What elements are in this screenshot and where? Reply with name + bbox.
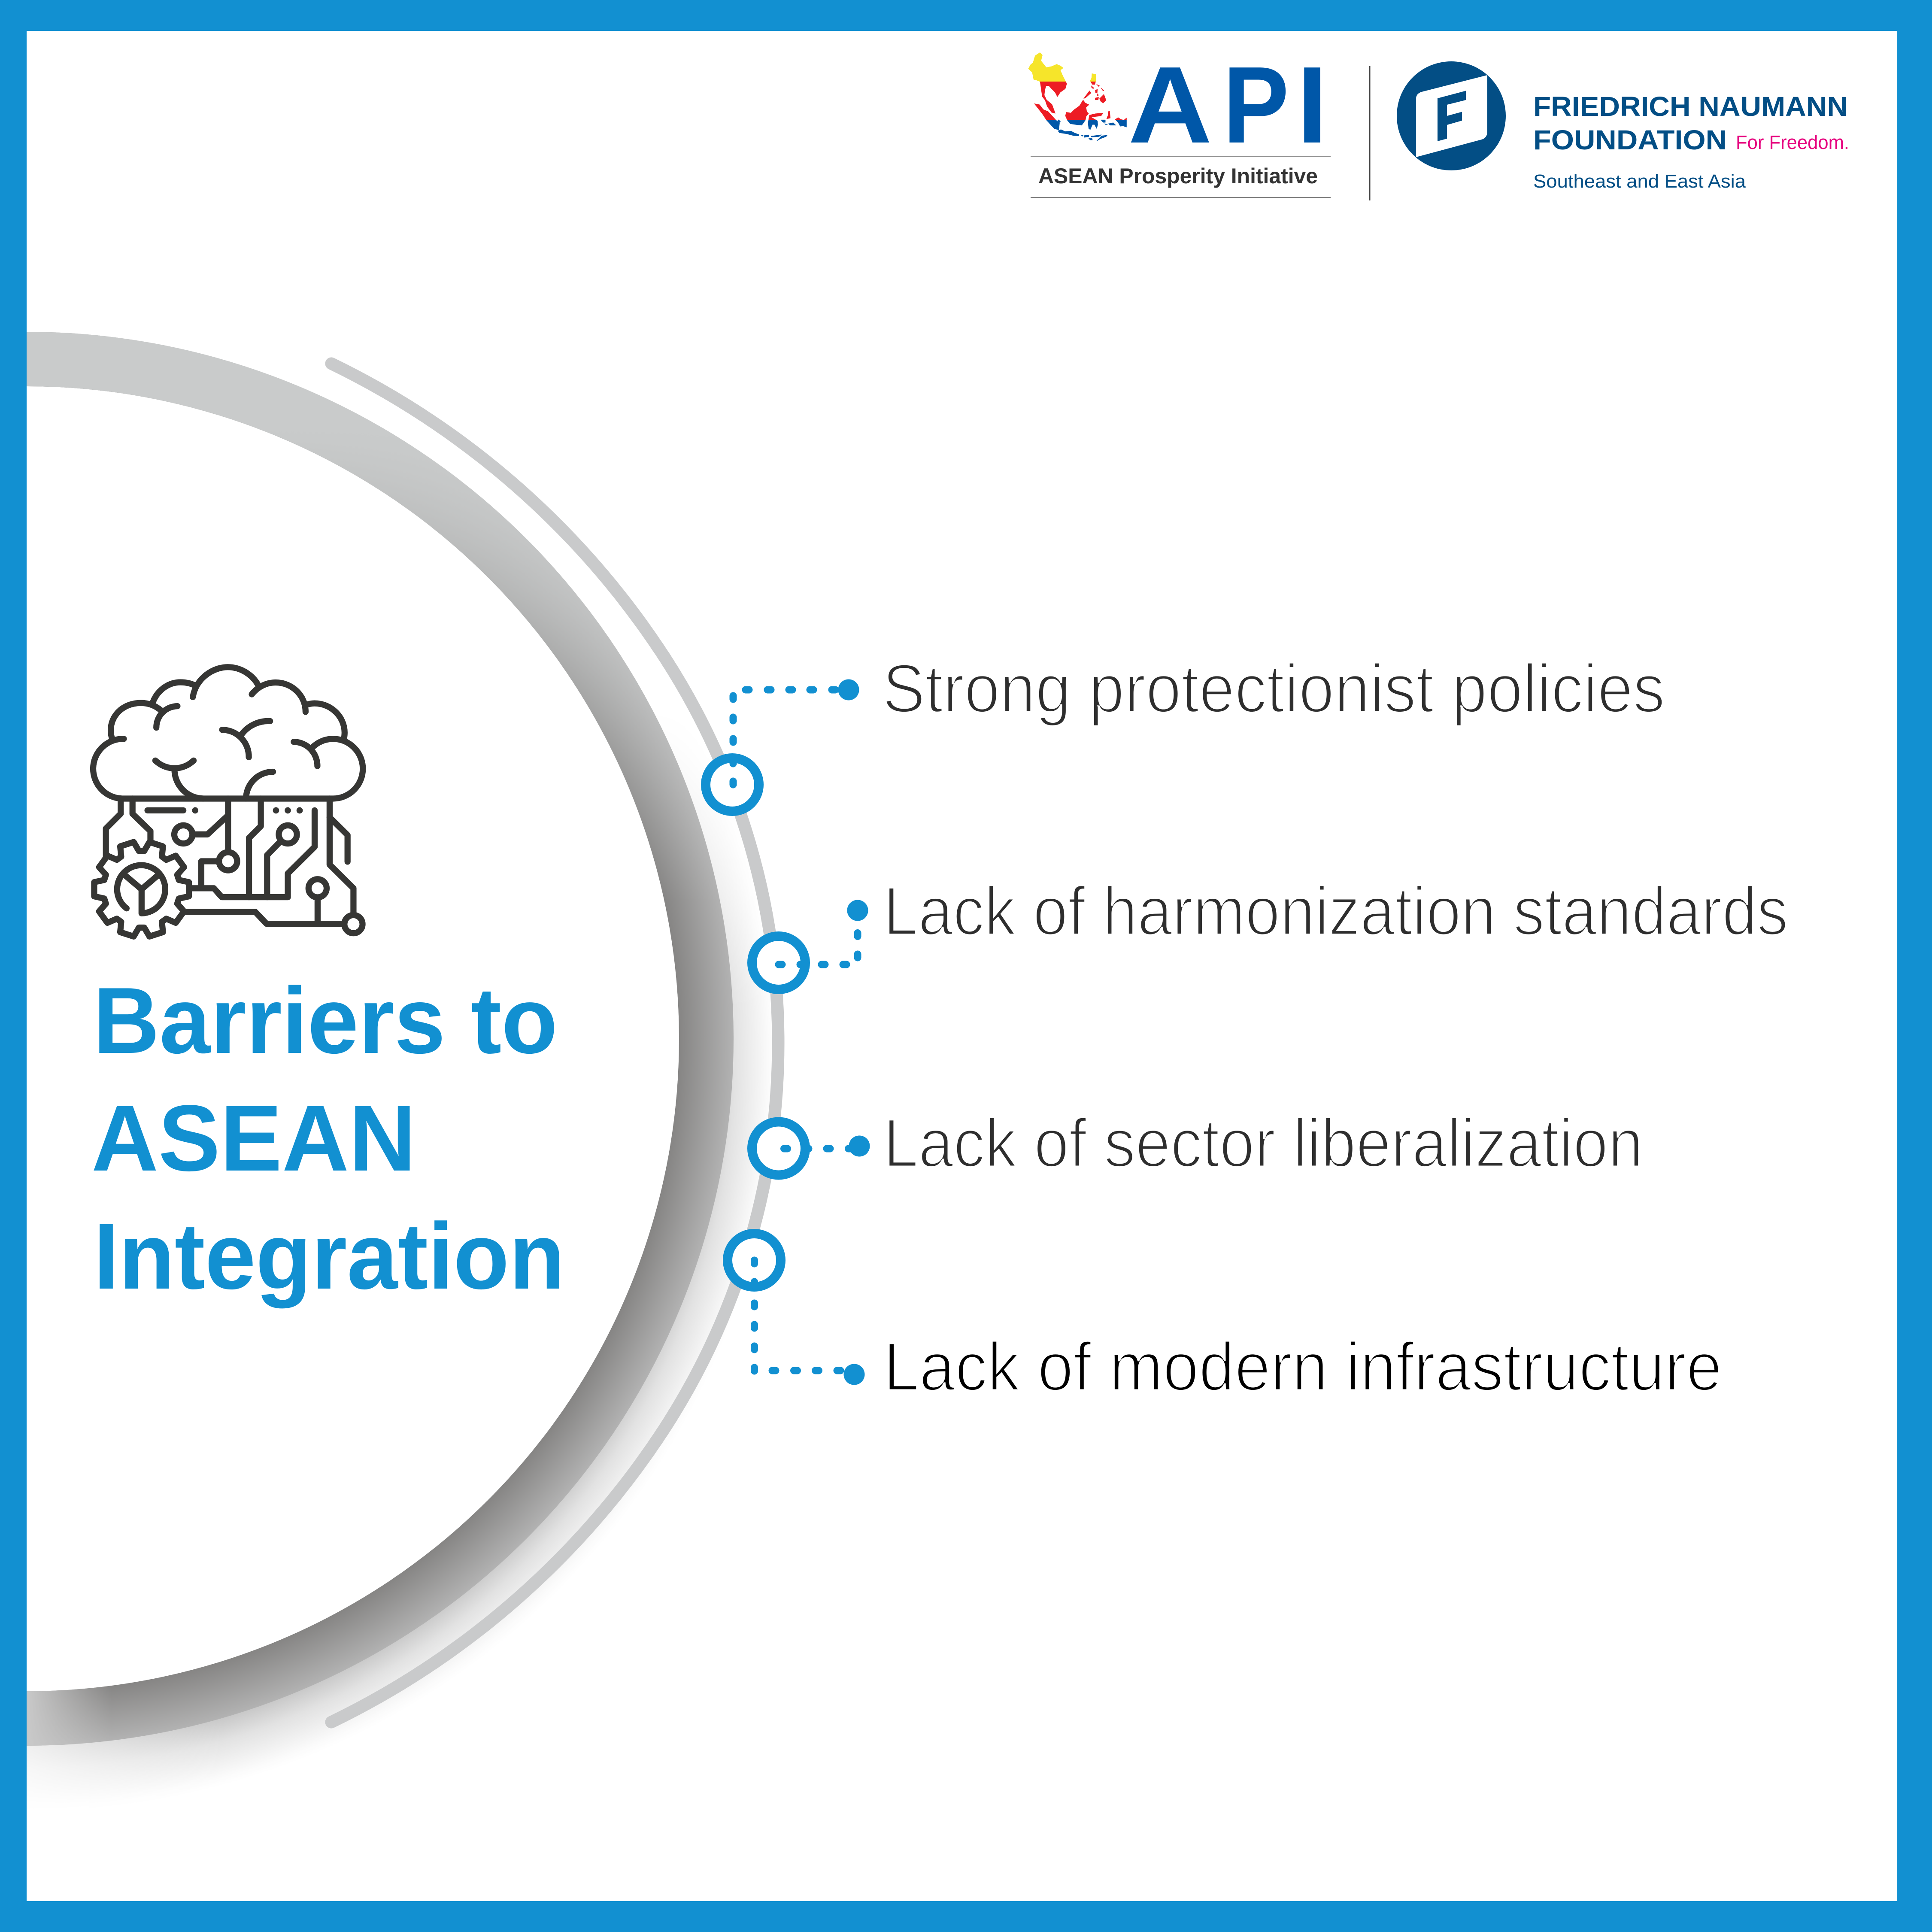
node 2 <box>752 936 805 989</box>
barrier 2 text: Lack of harmonization standards <box>883 872 1788 949</box>
connector 3 <box>752 1122 870 1175</box>
thin outer arc <box>331 364 778 1722</box>
connector 2 <box>752 900 868 989</box>
API logo <box>1028 44 1331 198</box>
API letters <box>1128 44 1328 166</box>
icon: ASEAN map <box>1028 53 1126 141</box>
barrier 3 text: Lack of sector liberalization <box>883 1104 1643 1181</box>
ring drop shadow <box>27 810 764 1785</box>
title: ASEAN <box>91 1086 416 1191</box>
connector 1 <box>706 679 859 811</box>
white inner disc <box>0 386 679 1691</box>
node 1 <box>706 758 759 811</box>
tagline: For Freedom. <box>1736 131 1849 153</box>
thick grey ring <box>0 359 707 1719</box>
API subtitle: ASEAN Prosperity Initiative <box>1038 164 1318 188</box>
title <box>91 968 565 1309</box>
title: Barriers to <box>93 968 558 1073</box>
node 4 <box>728 1234 781 1287</box>
API letters: I <box>1297 44 1328 166</box>
barrier 4 text: Lack of modern infrastructure <box>883 1328 1722 1405</box>
icon: brain cloud and circuit gear <box>93 667 363 937</box>
icon: F roundel <box>1397 61 1506 170</box>
foundation name: FOUNDATION <box>1533 124 1727 155</box>
foundation name: FRIEDRICH NAUMANN <box>1533 91 1848 122</box>
foundation name <box>1533 91 1848 155</box>
logo divider <box>1369 66 1370 200</box>
connector 4 <box>728 1234 864 1385</box>
API letters: A <box>1128 44 1212 166</box>
title: Integration <box>94 1204 565 1309</box>
node 3 <box>752 1122 805 1175</box>
region: Southeast and East Asia <box>1533 171 1746 192</box>
API letters: P <box>1223 44 1289 166</box>
barrier 1 text: Strong protectionist policies <box>883 650 1665 727</box>
Friedrich Naumann Foundation logo <box>1397 61 1849 192</box>
